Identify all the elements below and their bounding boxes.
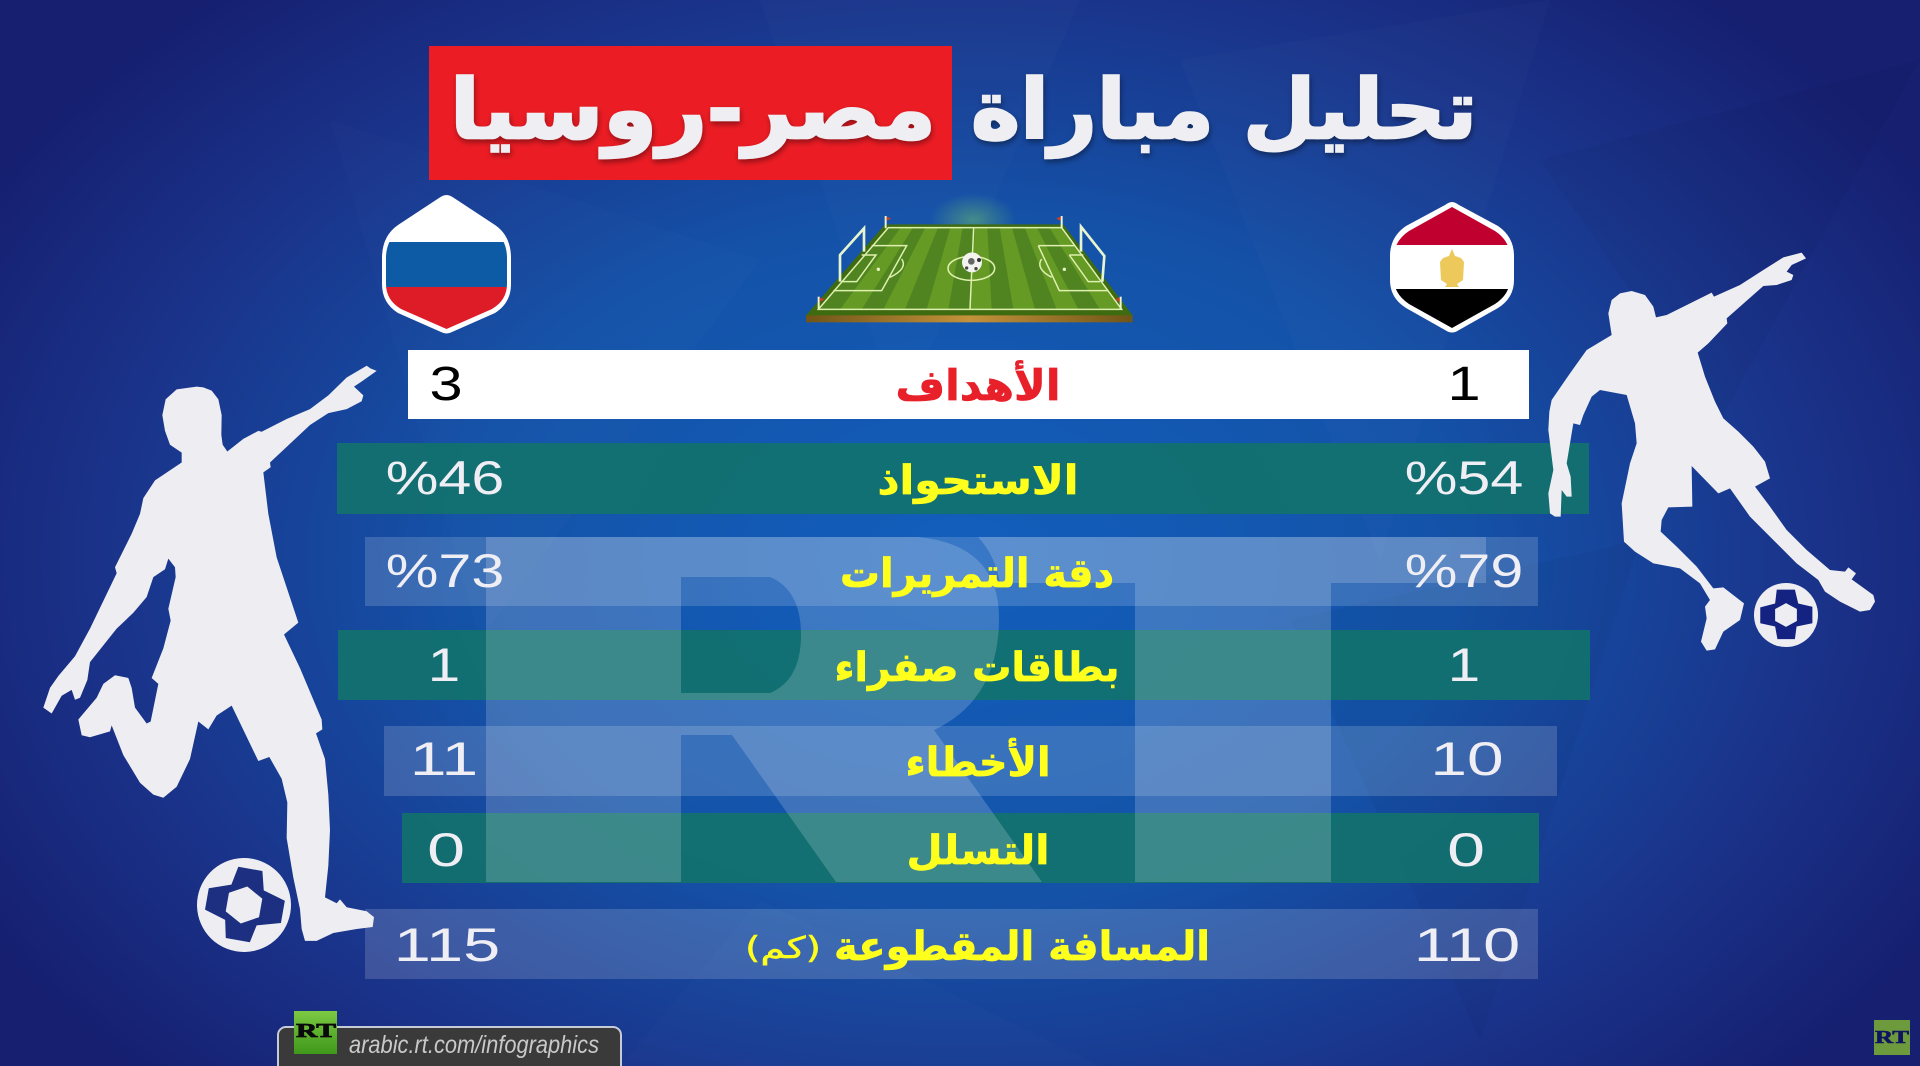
RT logo green: RT (296, 1020, 337, 1042)
RT logo green (294, 1011, 337, 1054)
left football icon (190, 851, 298, 959)
row: offsides: 0 (427, 824, 465, 876)
title (429, 46, 1477, 180)
row: goals: الأهداف (896, 360, 1060, 410)
row: yellow cards: 1 (428, 639, 460, 692)
row: goals: 3 (429, 357, 463, 411)
footer source tag (278, 1011, 621, 1066)
right player silhouette (1548, 253, 1875, 651)
row: goals (429, 357, 1481, 411)
row: yellow cards (428, 639, 1480, 692)
RT logo bottom right: RT (1875, 1027, 1909, 1047)
row: distance covered: (كم) (745, 931, 821, 966)
row: possession: %54 (1405, 453, 1523, 505)
RT logo bottom right (1874, 1020, 1910, 1055)
row: pass accuracy: %73 (386, 546, 504, 598)
right football icon (1754, 583, 1818, 647)
stat row backgrounds (337, 350, 1590, 979)
row: distance covered: 115 (394, 919, 500, 972)
row: pass accuracy: دقة التمريرات (840, 551, 1114, 597)
title red highlight box (429, 46, 952, 180)
row: fouls: الأخطاء (906, 737, 1050, 786)
row: pass accuracy: %79 (1405, 546, 1523, 598)
footer source url: arabic.rt.com/infographics (349, 1031, 599, 1059)
row: offsides: التسلل (906, 828, 1050, 874)
row: offsides: 0 (1447, 824, 1485, 876)
row: fouls: 11 (410, 733, 478, 786)
row: yellow cards: 1 (1448, 639, 1480, 692)
flag: Egypt (1390, 202, 1514, 332)
left player silhouette (43, 366, 377, 941)
row: yellow cards: بطاقات صفراء (834, 645, 1120, 691)
row: distance covered: 110 (1414, 919, 1520, 972)
row: pass accuracy (386, 546, 1523, 598)
row: possession: %46 (386, 453, 504, 505)
row: distance covered: المسافة المقطوعة (834, 924, 1210, 970)
row: possession (386, 453, 1523, 505)
icon: football pitch (806, 193, 1133, 322)
flag: Russia (382, 195, 512, 334)
row: fouls (410, 733, 1504, 786)
row: fouls: 10 (1430, 733, 1504, 786)
title white words: تحليل مباراة (971, 63, 1477, 158)
RT watermark (486, 537, 1486, 882)
row: offsides (427, 824, 1485, 876)
icon: eagle emblem (1440, 249, 1464, 287)
row: distance covered (394, 919, 1520, 972)
row: possession: الاستحواذ (878, 458, 1078, 504)
title highlighted words: مصر-روسيا (450, 63, 936, 159)
row: goals: 1 (1447, 357, 1481, 411)
